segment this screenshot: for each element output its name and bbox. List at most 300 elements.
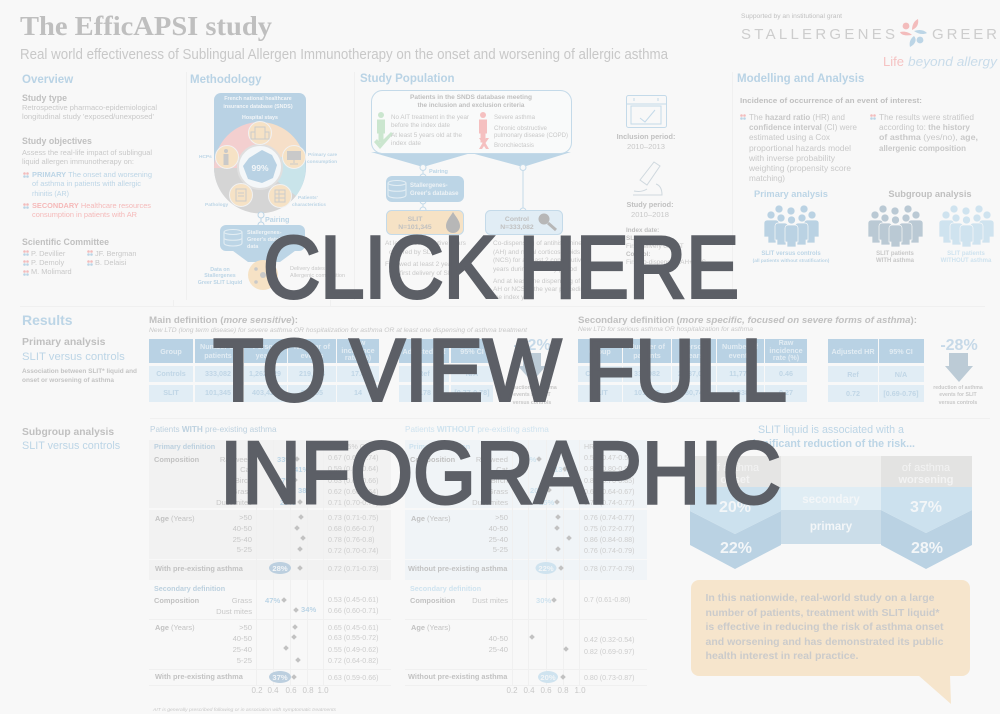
forest plot: patients with pre-existing asthma: Composition — [154, 455, 200, 464]
main definition heading: New LTD (long term disease) for severe asthma OR hospitalization for asthma OR at least one dispensing of asthma treatment — [149, 327, 527, 334]
index date: First delivery of SLIT — [626, 243, 684, 250]
icon: hospital — [248, 122, 272, 144]
connectors and pairing: Pairing — [429, 169, 449, 175]
icon: pathology clipboard — [230, 184, 252, 206]
forest plot: patients without pre-existing asthma: 0.7 (0.61-0.80) — [584, 596, 631, 604]
table: main definition: 17.4 — [351, 369, 365, 378]
data labels — [198, 267, 242, 286]
forest plot: patients with pre-existing asthma: 41% — [294, 465, 309, 474]
forest plot: patients with pre-existing asthma: Age (Years) — [155, 623, 195, 632]
forest plot: patients without pre-existing asthma: HR (95% CI) — [584, 443, 624, 451]
table: secondary definition: years — [685, 351, 703, 360]
panel: overview: Retrospective pharmaco-epidemiological — [22, 103, 157, 112]
results heading block — [22, 312, 137, 384]
index date: Control: — [626, 251, 650, 258]
Stallergenes-Greer database — [220, 225, 305, 262]
stratification text: according to: the history — [879, 123, 971, 132]
panel: modelling and analysis: Modelling and Analysis — [737, 73, 864, 85]
table: main definition: 333,082 — [205, 369, 231, 378]
icon: characteristics list — [268, 184, 292, 208]
chart: risk reduction ribbons: of asthma — [902, 462, 951, 474]
Control box: Control — [505, 216, 529, 223]
forest plot: patients without pre-existing asthma: 0.2 — [506, 686, 518, 695]
forest plot: patients with pre-existing asthma: 29% — [280, 498, 295, 507]
hazard ratio text: matching) — [749, 174, 785, 183]
forest plot: patients with pre-existing asthma: 0.8 — [302, 686, 314, 695]
table: main definition: [0.77-0.78] — [454, 388, 490, 397]
diagram labels: Patients' — [298, 195, 318, 201]
hazard ratio text: The hazard ratio (HR) and — [749, 113, 845, 122]
callout: minus 22 percent: reduction of asthma — [507, 385, 557, 391]
panel: modelling and analysis: Incidence of occurrence of an event of interest: — [740, 96, 922, 105]
panel: overview — [22, 74, 157, 276]
forest plot: patients with pre-existing asthma: 0.72 (0.70-0.74) — [328, 547, 378, 555]
forest plot: patients without pre-existing asthma: 0.75 (0.72-0.77) — [584, 525, 634, 533]
overlay: click here to view full infographic — [213, 218, 787, 522]
icon: people group with asthma — [868, 205, 923, 247]
control criteria text: years during the study period — [493, 266, 577, 273]
group labels — [753, 251, 992, 264]
table: main definition: 56,455 — [301, 388, 323, 397]
forest plot: patients with pre-existing asthma: Dust mites — [216, 607, 252, 616]
forest plot: patients with pre-existing asthma: 40-50 — [233, 634, 252, 643]
diagram labels: Primary care — [308, 152, 337, 158]
table: secondary definition: Number of — [722, 342, 759, 351]
forest plot: patients with pre-existing asthma: Secondary definition — [154, 584, 225, 593]
table: secondary definition: Ref — [847, 370, 859, 379]
main definition heading: Main definition ( more sensitive ): — [149, 315, 298, 325]
results heading block: SLIT versus controls — [22, 351, 125, 363]
sponsor logo: GREER — [932, 26, 997, 43]
SLIT criteria text: At least 2 consecutive years — [385, 240, 467, 247]
callout: minus 28 percent: versus controls — [939, 400, 977, 406]
SLIT box: SLIT — [408, 216, 423, 223]
callout: conclusion: health interest in real practice. — [706, 651, 859, 662]
panel: overview: M. Molimard — [31, 267, 72, 276]
forest plot: patients without pre-existing asthma: Age (Years) — [411, 514, 451, 523]
table: main definition: 0.78 — [417, 388, 431, 397]
callout: minus 28 percent: events for SLIT — [939, 392, 978, 398]
primary analysis heading: Primary analysis — [754, 189, 828, 199]
forest plot: patients with pre-existing asthma: 0.62 (0.60-0.64) — [328, 488, 378, 496]
forest plot: patients with pre-existing asthma: 0.63 (0.59-0.66) — [328, 674, 378, 682]
callout: minus 22 percent: versus controls — [513, 400, 551, 406]
table: secondary definition: incidence — [769, 346, 803, 355]
group labels: WITH asthma — [876, 258, 915, 264]
forest plot: patients with pre-existing asthma: Cat — [240, 465, 253, 474]
Stallergenes database box — [386, 176, 464, 202]
sponsor logo: Life — [883, 54, 904, 69]
table: main definition — [149, 338, 493, 402]
forest plot: patients with pre-existing asthma: Ragweed — [220, 455, 252, 464]
group labels: SLIT patients — [876, 251, 914, 257]
diagram labels: HCPs — [199, 154, 212, 160]
results heading block: Primary analysis — [22, 336, 106, 348]
forest plot: patients with pre-existing asthma: 0.59 (0.54-0.64) — [328, 465, 378, 473]
Stallergenes database box: Stallergenes- — [410, 183, 448, 189]
forest plot: patients with pre-existing asthma: 5-25 — [237, 656, 252, 665]
forest plot: patients with pre-existing asthma: 0.73 (0.71-0.75) — [328, 514, 378, 522]
group labels: WITHOUT asthma — [941, 258, 992, 264]
panel: overview: P. Devillier — [31, 249, 66, 258]
table: secondary definition: rate (%) — [773, 353, 800, 362]
forest plot: patients with pre-existing asthma: 0.67 (0.61-0.74) — [328, 454, 378, 462]
panel: overview: liquid allergen immunotherapy on: — [22, 157, 134, 166]
forest plot: patients without pre-existing asthma: 5-25 — [493, 545, 508, 554]
callout: conclusion — [691, 580, 970, 704]
chart: risk reduction ribbons: secondary — [802, 494, 860, 506]
control criteria text: (AH) and nasal corticosteroids — [493, 249, 581, 256]
table: secondary definition: Person — [682, 342, 706, 351]
forest plot: patients without pre-existing asthma: Secondary definition — [410, 584, 481, 593]
inclusion period: 2010–2013 — [627, 142, 665, 151]
subgroup analysis heading: Subgroup analysis — [22, 427, 114, 438]
table: main definition: Group — [160, 347, 182, 356]
forest plot: patients with pre-existing asthma: >50 — [239, 513, 252, 522]
forest plot: patients with pre-existing asthma: 38% — [298, 486, 313, 495]
inclusion criteria: At least 5 years old at the — [391, 132, 462, 139]
forest plot: patients without pre-existing asthma: 22% — [538, 564, 554, 573]
forest plot: patients with pre-existing asthma — [149, 425, 391, 695]
forest plot: patients with pre-existing asthma: 0.71 (0.70-0.73) — [328, 499, 378, 507]
callout: minus 22 percent: events for SLIT — [513, 392, 552, 398]
subgroup analysis heading: Subgroup analysis — [888, 189, 972, 199]
secondary definition heading: Secondary definition ( more specific, focused on severe forms of asthma ): — [578, 315, 917, 325]
table: secondary definition: 95% CI — [889, 347, 913, 356]
stratification text — [870, 113, 978, 153]
forest plot: patients with pre-existing asthma: Grass — [232, 596, 252, 605]
SLIT criteria text: covered by SLIT — [389, 249, 436, 256]
table: secondary definition: 680,744 — [681, 388, 707, 397]
table: main definition: 14 — [354, 388, 362, 397]
study period: Study period: — [626, 200, 674, 209]
forest plot: patients without pre-existing asthma: Without pre-existing asthma — [408, 672, 508, 681]
icon: people group without asthma — [939, 205, 994, 247]
exclusion criteria: pulmonary disease (COPD) — [494, 132, 568, 139]
diagram labels: characteristics — [292, 202, 326, 208]
callout: conclusion: number of patients, treatment with SLIT liquid* — [706, 608, 940, 619]
forest plot: patients with pre-existing asthma: 0.78 (0.76-0.8) — [328, 536, 375, 544]
forest plot: patients without pre-existing asthma: >50 — [495, 513, 508, 522]
table: secondary definition: 1,838 — [731, 388, 749, 397]
icon: SLIT liquid data circle — [248, 260, 278, 290]
callout: minus 22 percent — [507, 337, 557, 406]
chart: risk reduction ribbons: 22% — [720, 540, 752, 557]
panel: methodology: Methodology — [190, 74, 262, 86]
panel: overview: Overview — [22, 74, 73, 86]
forest plot: patients without pre-existing asthma: 0.6 — [540, 686, 552, 695]
table: main definition: N/A — [466, 369, 478, 378]
hazard ratio text: estimated using a Cox — [749, 133, 830, 142]
table: secondary definition: events — [729, 351, 751, 360]
forest plot: patients without pre-existing asthma: 0.76 (0.74-0.77) — [584, 514, 634, 522]
conclusion heading — [747, 424, 915, 450]
control criteria text: Co-dispensing of antihistamines — [493, 240, 586, 247]
forest plot: patients with pre-existing asthma: 0.6 — [285, 686, 297, 695]
index date: First co-dispensing AH+NCS — [626, 259, 706, 266]
table: secondary definition: Number of — [629, 342, 666, 351]
sponsor logo: beyond allergy — [908, 54, 999, 69]
group labels: SLIT versus controls — [761, 251, 821, 257]
group labels: SLIT patients — [947, 251, 985, 257]
panel: methodology — [190, 74, 345, 290]
chart: risk reduction ribbons: onset — [720, 474, 750, 486]
panel: methodology: Hospital stays — [242, 115, 278, 121]
table: main definition: 95% CI — [460, 347, 484, 356]
chart: risk reduction ribbons: 37% — [910, 499, 942, 516]
forest plot: patients with pre-existing asthma: 0.53 (0.45-0.61) — [328, 596, 378, 604]
panel: overview: Study type — [22, 93, 67, 103]
table: secondary definition: Raw — [779, 338, 794, 347]
table: main definition: patients — [204, 351, 232, 360]
table: main definition: 219,104 — [299, 369, 325, 378]
panel: study population: Study Population — [360, 73, 455, 85]
forest plot: patients with pre-existing asthma: 0.4 — [267, 686, 279, 695]
sponsor logo — [741, 13, 999, 69]
forest plot: patients with pre-existing asthma: 37% — [272, 673, 288, 682]
forest plot: patients without pre-existing asthma: Without pre-existing asthma — [408, 564, 508, 573]
inclusion period: Inclusion period: — [617, 132, 675, 141]
table: main definition: 101,345 — [205, 388, 231, 397]
icon: logo mark — [900, 19, 927, 47]
criteria heading — [410, 94, 532, 109]
forest plot: patients without pre-existing asthma: 13% — [554, 465, 569, 474]
inclusion criteria: index date — [391, 140, 422, 147]
SLIT criteria text — [385, 240, 473, 277]
forest plot: patients with pre-existing asthma: Age (Years) — [155, 514, 195, 523]
forest plot: patients without pre-existing asthma: 0.87 (0.80-0.94) — [584, 465, 634, 473]
data bullets: Delivery dates — [290, 266, 325, 272]
forest plot: patients without pre-existing asthma: 0.65 (0.64-0.67) — [584, 488, 634, 496]
diagram: SNDS database — [214, 93, 306, 213]
table: secondary definition: [0.69-0.76] — [883, 389, 919, 398]
forest plot: patients with pre-existing asthma: With pre-existing asthma — [155, 672, 244, 681]
panel: methodology: French national healthcare — [224, 96, 292, 102]
icon: people group primary — [764, 205, 819, 247]
forest plot: patients with pre-existing asthma: 28% — [272, 564, 288, 573]
forest plot: patients with pre-existing asthma: Grass — [232, 487, 252, 496]
table: secondary definition: Group — [589, 347, 611, 356]
panel: overview: PRIMARY The onset and worsening — [32, 170, 152, 179]
panel: overview: Assess the real-life impact of sublingual — [22, 148, 152, 157]
results heading block: Association between SLIT* liquid and — [22, 369, 137, 375]
criteria heading: the inclusion and exclusion criteria — [418, 102, 525, 109]
table: main definition: years — [256, 351, 274, 360]
forest plot: patients without pre-existing asthma: Patients WITHOUT pre-existing asthma — [405, 425, 549, 434]
table: secondary definition: SLIT — [592, 388, 608, 397]
forest plot: patients without pre-existing asthma: Dust mites — [472, 498, 508, 507]
table: secondary definition: N/A — [895, 370, 907, 379]
table: secondary definition: 333,082 — [634, 369, 660, 378]
pairing connector: Pairing — [265, 215, 289, 224]
forest plot: patients without pre-existing asthma: 0.80 (0.73-0.87) — [584, 674, 634, 682]
exclusion criteria: Chronic obstructive — [494, 125, 547, 132]
inclusion period — [617, 132, 675, 151]
table: main definition: Number of — [294, 342, 331, 351]
forest plot: patients with pre-existing asthma: 34% — [301, 605, 316, 614]
forest plot: patients without pre-existing asthma: 30% — [536, 596, 551, 605]
panel: overview: of asthma in patients with allergic — [32, 179, 141, 188]
secondary definition heading: New LTD for serious asthma OR hospitalization for asthma — [578, 326, 753, 333]
forest plot: patients with pre-existing asthma: With pre-existing asthma — [155, 564, 244, 573]
panel: overview: rhinitis (AR) — [32, 189, 69, 198]
callout: minus 22 percent: -22% — [513, 337, 551, 354]
forest plot: patients without pre-existing asthma: 0.80 (0.76-0.85) — [584, 477, 634, 485]
icon: primary care monitor — [282, 146, 306, 168]
forest plot: patients with pre-existing asthma: Dust mites — [216, 498, 252, 507]
icon: microscope — [633, 162, 662, 195]
conclusion heading: significant reduction of the risk... — [747, 438, 915, 450]
forest plot: patients without pre-existing asthma: Ragweed — [476, 455, 508, 464]
stratification text: The results were stratified — [879, 113, 974, 122]
table: main definition: rate (%) — [345, 353, 372, 362]
forest plot: patients with pre-existing asthma: Birch — [235, 476, 252, 485]
subgroup analysis heading: SLIT versus controls — [22, 440, 121, 452]
forest plot: patients with pre-existing asthma: 25-40 — [233, 535, 252, 544]
panel: overview: Scientific Committee — [22, 237, 109, 247]
inclusion criteria: before the index date — [391, 122, 450, 129]
control criteria text: AH or NCS in the year preceding — [493, 286, 588, 293]
France map circle 99%: 99% — [251, 163, 269, 173]
forest plot: patients without pre-existing asthma: 0.52 (0.47-0.58) — [584, 454, 634, 462]
main definition heading — [149, 315, 527, 334]
forest plot: patients without pre-existing asthma: 1.0 — [574, 686, 586, 695]
hazard ratio text: confidence interval (CI) were — [749, 123, 857, 132]
callout: minus 28 percent: -28% — [940, 337, 978, 354]
diagram labels: consumption — [307, 159, 337, 165]
icon: calendar — [626, 96, 666, 128]
chart: risk reduction ribbons: worsening — [897, 474, 954, 486]
forest plot: patients without pre-existing asthma: Dust mites — [472, 596, 508, 605]
SLIT criteria text: Followed at least 2 years after — [385, 261, 473, 268]
panel: overview: B. Delaisi — [95, 258, 127, 267]
exclusion criteria — [479, 112, 568, 149]
forest plot: patients with pre-existing asthma: 40-50 — [233, 524, 252, 533]
forest plot: patients without pre-existing asthma: 0.42 (0.32-0.54) — [584, 636, 634, 644]
forest plot: patients without pre-existing asthma: 48% — [521, 455, 536, 464]
SLIT criteria text: the first delivery of SLIT — [389, 270, 457, 277]
forest plot: patients without pre-existing asthma: 0.8 — [557, 686, 569, 695]
callout: conclusion: is effective in reducing the risk of asthma onset — [706, 622, 944, 633]
forest plot: patients without pre-existing asthma: 0.76 (0.74-0.79) — [584, 547, 634, 555]
exclusion criteria: Bronchiectasis — [494, 142, 534, 149]
forest plot: patients with pre-existing asthma: 0.66 (0.60-0.71) — [328, 607, 378, 615]
stratification text: of asthma (yes/no), age, — [879, 133, 978, 142]
overlay: click here to view full infographic: CLICK HERE — [263, 218, 739, 316]
sponsor logo: Supported by an institutional grant — [741, 13, 842, 20]
forest plot: patients without pre-existing asthma: Grass — [488, 487, 508, 496]
forest plot: patients with pre-existing asthma: 0.55 (0.49-0.62) — [328, 646, 378, 654]
table: secondary definition: 0.72 — [846, 389, 860, 398]
table: main definition: Raw — [351, 338, 366, 347]
subgroup analysis heading — [22, 427, 121, 452]
forest plot: patients without pre-existing asthma: 20% — [549, 476, 564, 485]
forest plot: patients without pre-existing asthma: Composition — [410, 455, 456, 464]
forest plot: patients with pre-existing asthma: 1.0 — [317, 686, 329, 695]
forest plot: patients with pre-existing asthma: 33% — [277, 455, 292, 464]
table: secondary definition: patients — [633, 351, 661, 360]
callout: conclusion: In this nationwide, real-world study on a large — [706, 593, 935, 604]
Stallergenes-Greer database: data — [247, 244, 259, 250]
table: main definition: 1,262,329 — [249, 369, 281, 378]
forest plot: patients with pre-existing asthma: 0.2 — [251, 686, 263, 695]
overlay: click here to view full infographic: TO VIEW FULL — [213, 320, 787, 420]
table: secondary definition: Controls — [585, 369, 615, 378]
study period — [626, 200, 674, 219]
forest plot: patients with pre-existing asthma: HR (95% CI) — [329, 443, 369, 451]
criteria heading: Patients in the SNDS database meeting — [410, 94, 532, 101]
table: main definition: 403,428 — [252, 388, 278, 397]
hazard ratio text: with inverse probability — [748, 154, 835, 163]
data labels: Greer SLIT Liquid — [198, 280, 242, 286]
title: The EfficAPSI study — [20, 11, 273, 41]
callout: conclusion: and worsening and has demonstrated its public — [706, 637, 944, 648]
forest plot: patients with pre-existing asthma: Primary definition — [154, 442, 215, 451]
forest plot: patients without pre-existing asthma: 40-50 — [489, 634, 508, 643]
callout: minus 28 percent — [933, 337, 983, 406]
control criteria text — [493, 240, 588, 301]
forest plot: patients with pre-existing asthma: 0.63 (0.60-0.66) — [328, 477, 378, 485]
forest plot: patients with pre-existing asthma: 0.65 (0.45-0.61) — [328, 624, 378, 632]
forest plot: patients without pre-existing asthma: Age (Years) — [411, 623, 451, 632]
Control box — [486, 210, 562, 234]
shaded bands — [405, 440, 647, 580]
panel: overview: SECONDARY Healthcare resources — [32, 201, 151, 210]
shaded bands — [149, 440, 391, 580]
data labels: Data on — [210, 267, 230, 273]
inclusion criteria: No AIT treatment in the year — [391, 114, 469, 121]
footnote: AIT is generally prescribed following or in association with symptomatic treatments — [152, 707, 337, 712]
forest plot: patients with pre-existing asthma: 5-25 — [237, 545, 252, 554]
forest plot: patients without pre-existing asthma: Birch — [491, 476, 508, 485]
table: secondary definition: 0.27 — [779, 388, 793, 397]
forest plot: patients without pre-existing asthma: 20% — [530, 486, 545, 495]
panel: methodology: insurance database (SNDS) — [223, 104, 293, 110]
panel: modelling and analysis — [737, 73, 994, 264]
table: main definition: Adjusted HR — [402, 347, 446, 356]
secondary definition heading — [578, 315, 917, 333]
Control box: N=333,082 — [500, 224, 534, 231]
study period: 2010–2018 — [631, 210, 669, 219]
forest plot: patients without pre-existing asthma: 25-40 — [489, 645, 508, 654]
forest plot: patients with pre-existing asthma: 47% — [265, 596, 280, 605]
forest plot: patients without pre-existing asthma: 0.75 (0.74-0.77) — [584, 499, 634, 507]
table: secondary definition: 11,778 — [729, 369, 751, 378]
callout: minus 28 percent: reduction of asthma — [933, 385, 983, 391]
forest plot: patients without pre-existing asthma: 20% — [540, 673, 556, 682]
panel: overview: consumption in patients with AR — [32, 210, 137, 219]
table: secondary definition: 0.46 — [779, 369, 793, 378]
diagram labels: Pathology — [205, 202, 229, 208]
table: main definition: Person — [253, 342, 277, 351]
forest plot: patients without pre-existing asthma: 0.82 (0.69-0.97) — [584, 648, 634, 656]
results heading block: onset or worsening of asthma — [22, 378, 115, 384]
table: main definition: Number of — [200, 342, 237, 351]
results heading block: Results — [22, 312, 73, 328]
donut segments — [214, 122, 306, 213]
table: secondary definition — [578, 338, 924, 402]
connectors and pairing — [420, 164, 526, 214]
table: main definition: Controls — [156, 369, 186, 378]
panel: overview: JF. Bergman — [95, 249, 136, 258]
forest plot: patients without pre-existing asthma — [405, 425, 647, 695]
index date: SLIT: — [626, 235, 641, 242]
table: main definition: events — [301, 351, 323, 360]
subtitle: Real world effectiveness of Sublingual Allergen Immunotherapy on the onset and worsening of allergic asthma — [20, 46, 669, 63]
pairing connector — [258, 212, 289, 228]
data labels: Stallergenes — [204, 273, 236, 279]
hazard ratio text — [740, 113, 857, 183]
